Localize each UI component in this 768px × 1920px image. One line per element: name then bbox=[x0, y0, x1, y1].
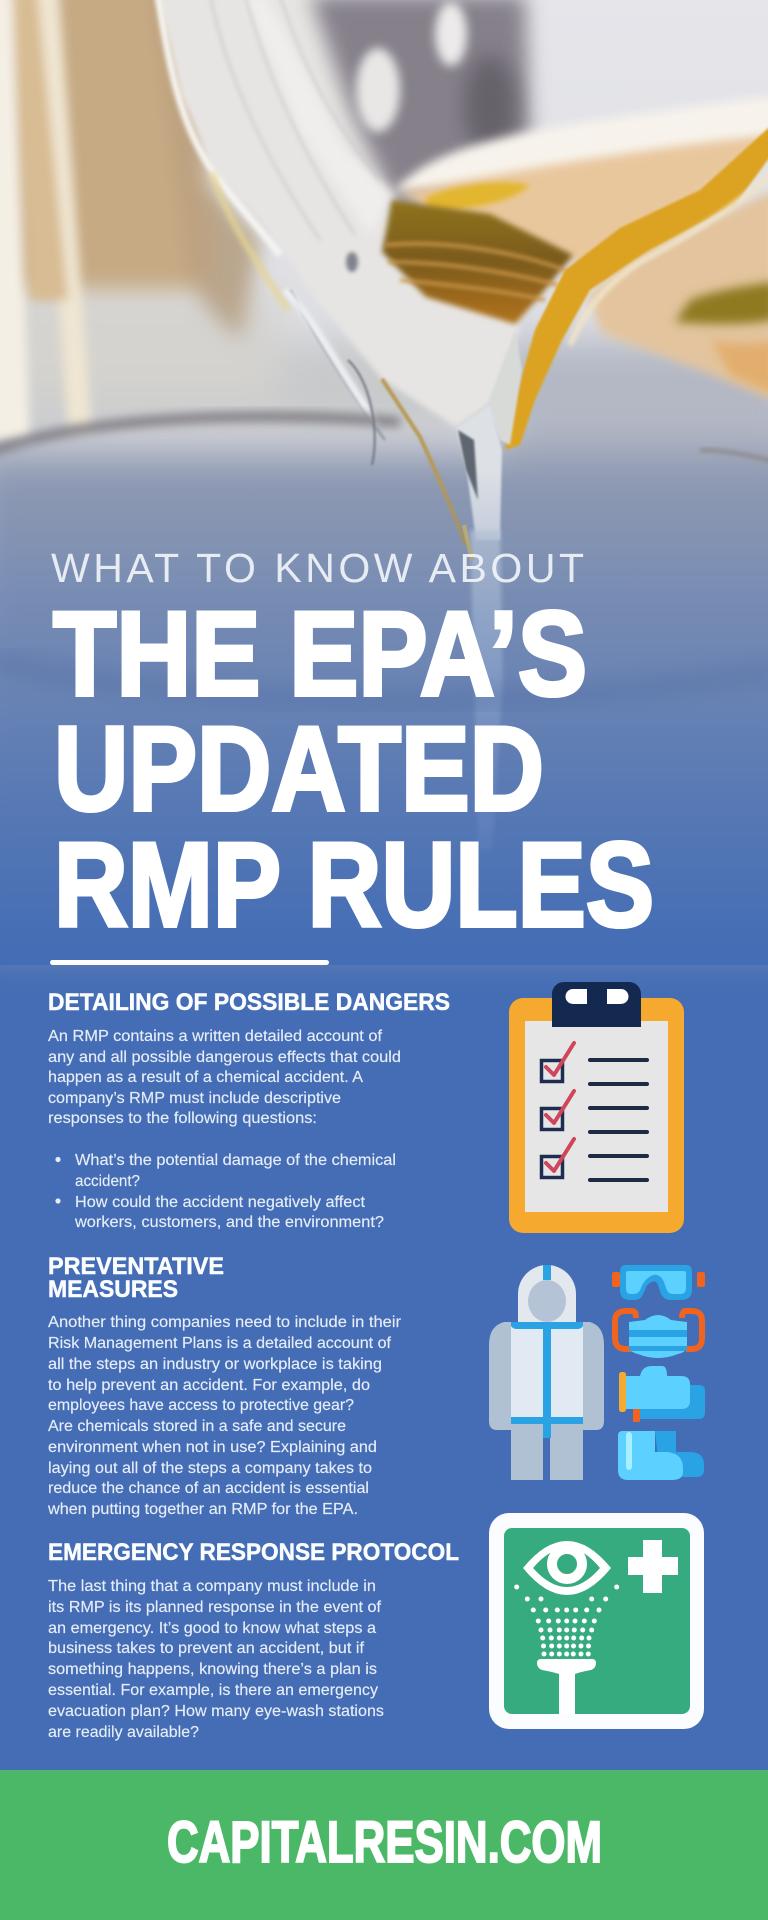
shower head and stem bbox=[537, 1659, 596, 1714]
text block: emergency response body: its RMP is its planned response in the event of bbox=[48, 1599, 382, 1616]
text block: emergency response body: evacuation plan? How many eye-wash stations bbox=[48, 1703, 384, 1720]
eye symbol bbox=[523, 1541, 611, 1595]
bullet list: questions: accident? bbox=[75, 1173, 140, 1190]
photo: dark rim of the container bbox=[0, 417, 400, 452]
title: line two: UPDATED bbox=[54, 702, 544, 836]
icon: shoe cover bbox=[618, 1431, 704, 1480]
text block: preventative measures body: Another thing companies need to include in their bbox=[48, 1314, 401, 1331]
text block: preventative measures body: employees have access to protective gear? bbox=[48, 1397, 354, 1414]
icon: protective gear set bbox=[489, 1265, 705, 1480]
text block: preventative measures body: laying out all of the steps a company takes to bbox=[48, 1460, 372, 1477]
text block: preventative measures body: all the steps an industry or workplace is taking bbox=[48, 1356, 382, 1373]
icon: glove bbox=[619, 1366, 705, 1422]
heading: preventative measures: PREVENTATIVE bbox=[48, 1253, 224, 1280]
icon: safety goggles bbox=[612, 1265, 705, 1300]
heading: emergency response protocol: EMERGENCY RESPONSE PROTOCOL bbox=[48, 1539, 459, 1566]
water spray drops bbox=[514, 1584, 619, 1656]
text block: dangers intro: company’s RMP must include descriptive bbox=[48, 1090, 341, 1107]
icon: protective suit bbox=[489, 1265, 604, 1480]
text block: dangers intro: An RMP contains a written detailed account of bbox=[48, 1028, 383, 1045]
icon: eye wash station sign bbox=[489, 1513, 704, 1729]
text block: dangers intro: any and all possible dangerous effects that could bbox=[48, 1049, 401, 1066]
title: line one: THE EPA’S bbox=[53, 587, 587, 721]
text block: emergency response body: business takes to prevent an accident, but if bbox=[48, 1640, 365, 1657]
bullet list: questions: workers, customers, and the environment? bbox=[74, 1214, 384, 1231]
text block: preventative measures body: Are chemicals stored in a safe and secure bbox=[48, 1418, 346, 1435]
text block: emergency response body bbox=[48, 1578, 384, 1741]
text block: preventative measures body: reduce the chance of an accident is essential bbox=[48, 1480, 369, 1497]
bullet list: questions: How could the accident negatively affect bbox=[75, 1194, 366, 1211]
heading: preventative measures: MEASURES bbox=[48, 1276, 178, 1303]
panel: preventative measures bbox=[47, 1253, 401, 1518]
icon: face mask bbox=[615, 1311, 702, 1358]
text block: preventative measures body bbox=[47, 1314, 401, 1518]
photo: glass body bbox=[158, 0, 530, 465]
panel: detailing of possible dangers bbox=[48, 989, 450, 1231]
text block: preventative measures body: when putting together an RMP for the EPA. bbox=[47, 1501, 358, 1518]
panel: emergency response protocol bbox=[48, 1539, 459, 1741]
title: line three: RMP RULES bbox=[54, 818, 654, 952]
first aid cross bbox=[628, 1540, 678, 1593]
text block: preventative measures body: environment when not in use? Explaining and bbox=[48, 1439, 377, 1456]
text block: preventative measures body: to help prevent an accident. For example, do bbox=[48, 1377, 370, 1394]
text block: preventative measures body: Risk Management Plans is a detailed account of bbox=[48, 1335, 392, 1352]
text block: emergency response body: essential. For example, is there an emergency bbox=[48, 1682, 378, 1699]
bullet list: questions bbox=[55, 1152, 396, 1231]
heading: preventative measures bbox=[48, 1253, 224, 1303]
photo: right oil chamber bbox=[382, 96, 768, 400]
text block: dangers intro: responses to the following questions: bbox=[48, 1110, 317, 1127]
photo: amber stream and clear pour bbox=[0, 122, 768, 850]
bullet list: questions: What’s the potential damage of the chemical bbox=[75, 1152, 396, 1169]
footer: website: CAPITALRESIN.COM bbox=[167, 1810, 602, 1875]
icon: clipboard checklist bbox=[509, 982, 684, 1233]
title underline bbox=[50, 960, 329, 965]
text block: emergency response body: an emergency. It’s good to know what steps a bbox=[48, 1620, 376, 1637]
text block: dangers intro bbox=[48, 1028, 401, 1127]
text block: emergency response body: are readily available? bbox=[48, 1724, 199, 1741]
heading: detailing of possible dangers: DETAILING OF POSSIBLE DANGERS bbox=[48, 989, 450, 1016]
title block bbox=[51, 545, 654, 952]
text block: emergency response body: The last thing that a company must include in bbox=[48, 1578, 376, 1595]
title: kicker: WHAT TO KNOW ABOUT bbox=[51, 545, 584, 591]
footer band bbox=[0, 1770, 768, 1920]
text block: emergency response body: something happens, knowing there’s a plan is bbox=[48, 1661, 377, 1678]
photo: oil pouring from glass bbox=[0, 0, 768, 965]
text block: dangers intro: happen as a result of a chemical accident. A bbox=[48, 1069, 363, 1086]
